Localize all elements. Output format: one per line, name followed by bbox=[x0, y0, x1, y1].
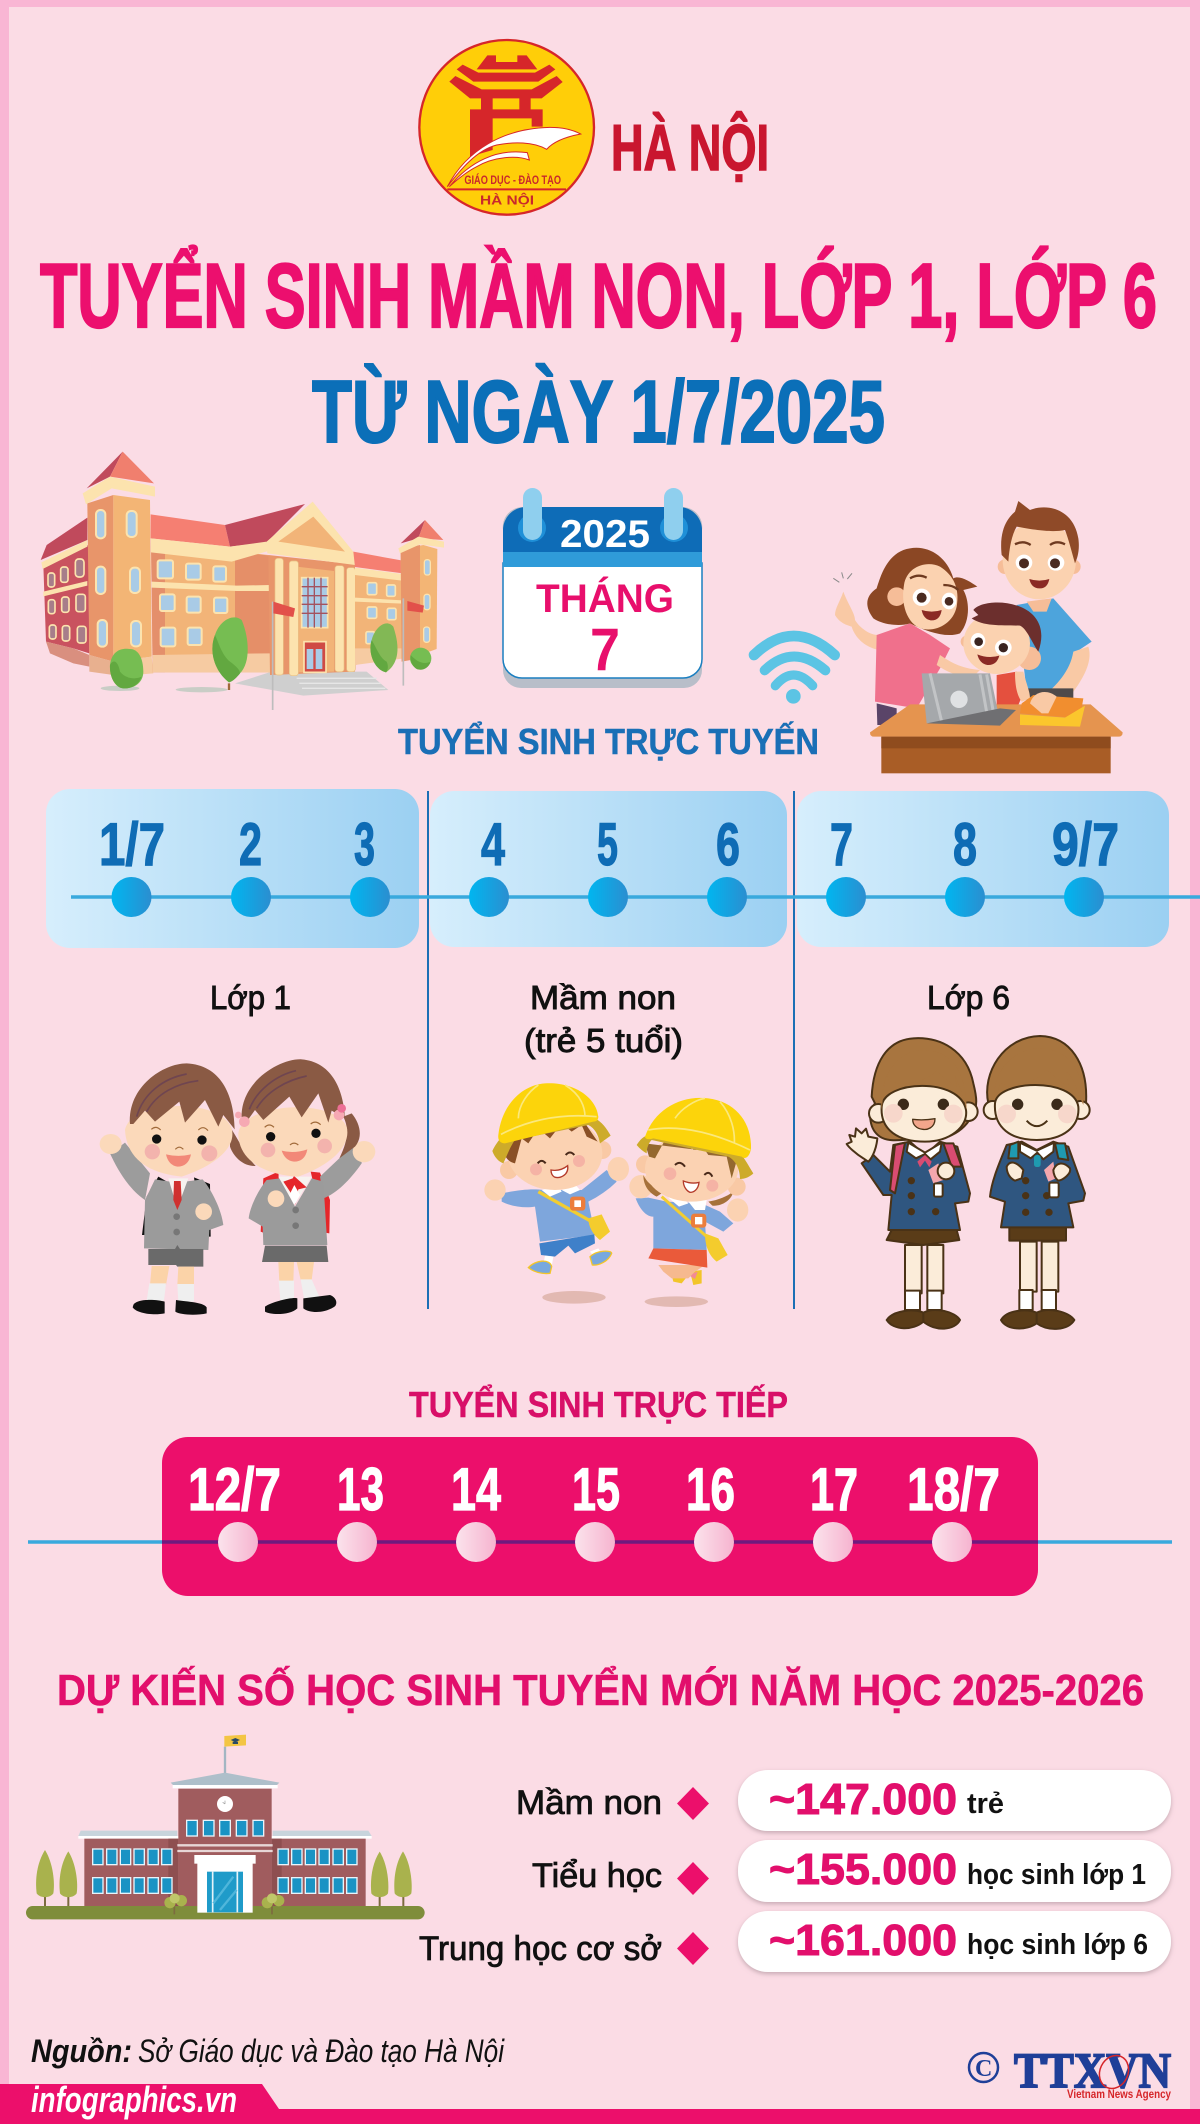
calendar: July 2025: 7 bbox=[590, 616, 620, 683]
row: primary count: học sinh lớp 1 bbox=[967, 1859, 1146, 1891]
label: grade 6: Lớp 6 bbox=[927, 979, 1010, 1016]
illustration: school building bbox=[41, 452, 444, 710]
illustration: school with flag bbox=[26, 1735, 425, 1919]
panel: online dates bbox=[46, 789, 1200, 1309]
label: grade 1: Lớp 1 bbox=[210, 979, 291, 1016]
logo: TTXVN: Vietnam News Agency bbox=[1067, 2087, 1171, 2101]
row: preschool count: Mầm non bbox=[516, 1784, 662, 1822]
label: preschool bbox=[524, 979, 683, 1059]
icon: Hanoi education logo: GIÁO DỤC - ĐÀO TẠO bbox=[464, 172, 561, 187]
label: preschool: (trẻ 5 tuổi) bbox=[524, 1022, 683, 1059]
panel: direct dates: 15 bbox=[572, 1456, 620, 1523]
panel: online dates: 2 bbox=[239, 811, 262, 878]
title: line two: TỪ NGÀY 1/7/2025 bbox=[312, 362, 885, 461]
row: preschool count: trẻ bbox=[967, 1788, 1004, 1820]
panel: direct dates bbox=[28, 1437, 1172, 1596]
panel: online dates: 6 bbox=[716, 811, 740, 878]
panel: direct dates: 13 bbox=[337, 1456, 384, 1523]
logo: TTXVN bbox=[969, 2042, 1171, 2101]
heading: online enrolment: TUYỂN SINH TRỰC TUYẾN bbox=[398, 720, 819, 762]
label: preschool: Mầm non bbox=[530, 979, 676, 1016]
panel: direct dates: 18/7 bbox=[907, 1456, 1000, 1523]
source line: Nguồn: bbox=[31, 2033, 132, 2069]
heading: Hà Nội: HÀ NỘI bbox=[611, 111, 769, 184]
panel: online dates: 4 bbox=[481, 811, 505, 878]
illustration: preschool children bbox=[484, 1083, 753, 1307]
icon: Hanoi education logo: HÀ NỘI bbox=[480, 193, 534, 208]
row: lower secondary count: ~161.000 bbox=[769, 1916, 957, 1965]
illustration: grade 6 pupils bbox=[847, 1036, 1090, 1329]
calendar: July 2025: THÁNG bbox=[536, 576, 674, 621]
panel: online dates: 7 bbox=[830, 811, 853, 878]
icon: wifi bbox=[754, 636, 835, 704]
row: lower secondary count: Trung học cơ sở bbox=[419, 1930, 662, 1968]
panel: online dates: 9/7 bbox=[1052, 811, 1119, 878]
row: primary count: ~155.000 bbox=[769, 1845, 957, 1894]
source line bbox=[31, 2033, 505, 2069]
footer band: infographics.vn: infographics.vn bbox=[31, 2079, 237, 2120]
footer band: infographics.vn bbox=[0, 2079, 1200, 2124]
illustration: family at laptop bbox=[833, 501, 1123, 773]
logo: TTXVN: C bbox=[975, 2056, 992, 2082]
calendar: July 2025 bbox=[503, 488, 702, 688]
panel: online dates: 1/7 bbox=[99, 811, 165, 878]
heading: direct enrolment: TUYỂN SINH TRỰC TIẾP bbox=[409, 1383, 788, 1425]
row: preschool count: ~147.000 bbox=[769, 1775, 957, 1824]
panel: online dates: 8 bbox=[953, 811, 977, 878]
logo: TTXVN: TTXVN bbox=[1014, 2042, 1171, 2098]
row: primary count: Tiểu học bbox=[532, 1857, 662, 1895]
source line: Sở Giáo dục và Đào tạo Hà Nội bbox=[138, 2033, 505, 2069]
panel: direct dates: 12/7 bbox=[188, 1456, 281, 1523]
icon: Hanoi education logo bbox=[419, 40, 594, 215]
panel: direct dates: 16 bbox=[686, 1456, 735, 1523]
panel: direct dates: 14 bbox=[451, 1456, 501, 1523]
row: lower secondary count: học sinh lớp 6 bbox=[967, 1929, 1148, 1961]
row: lower secondary count bbox=[419, 1911, 1171, 1972]
row: primary count bbox=[532, 1840, 1171, 1902]
calendar: July 2025: 2025 bbox=[560, 513, 650, 556]
row: preschool count bbox=[516, 1770, 1171, 1831]
panel: online dates: 3 bbox=[354, 811, 375, 878]
panel: online dates: 5 bbox=[597, 811, 618, 878]
panel: direct dates: 17 bbox=[810, 1456, 858, 1523]
illustration: grade 1 pupils bbox=[100, 1059, 375, 1315]
